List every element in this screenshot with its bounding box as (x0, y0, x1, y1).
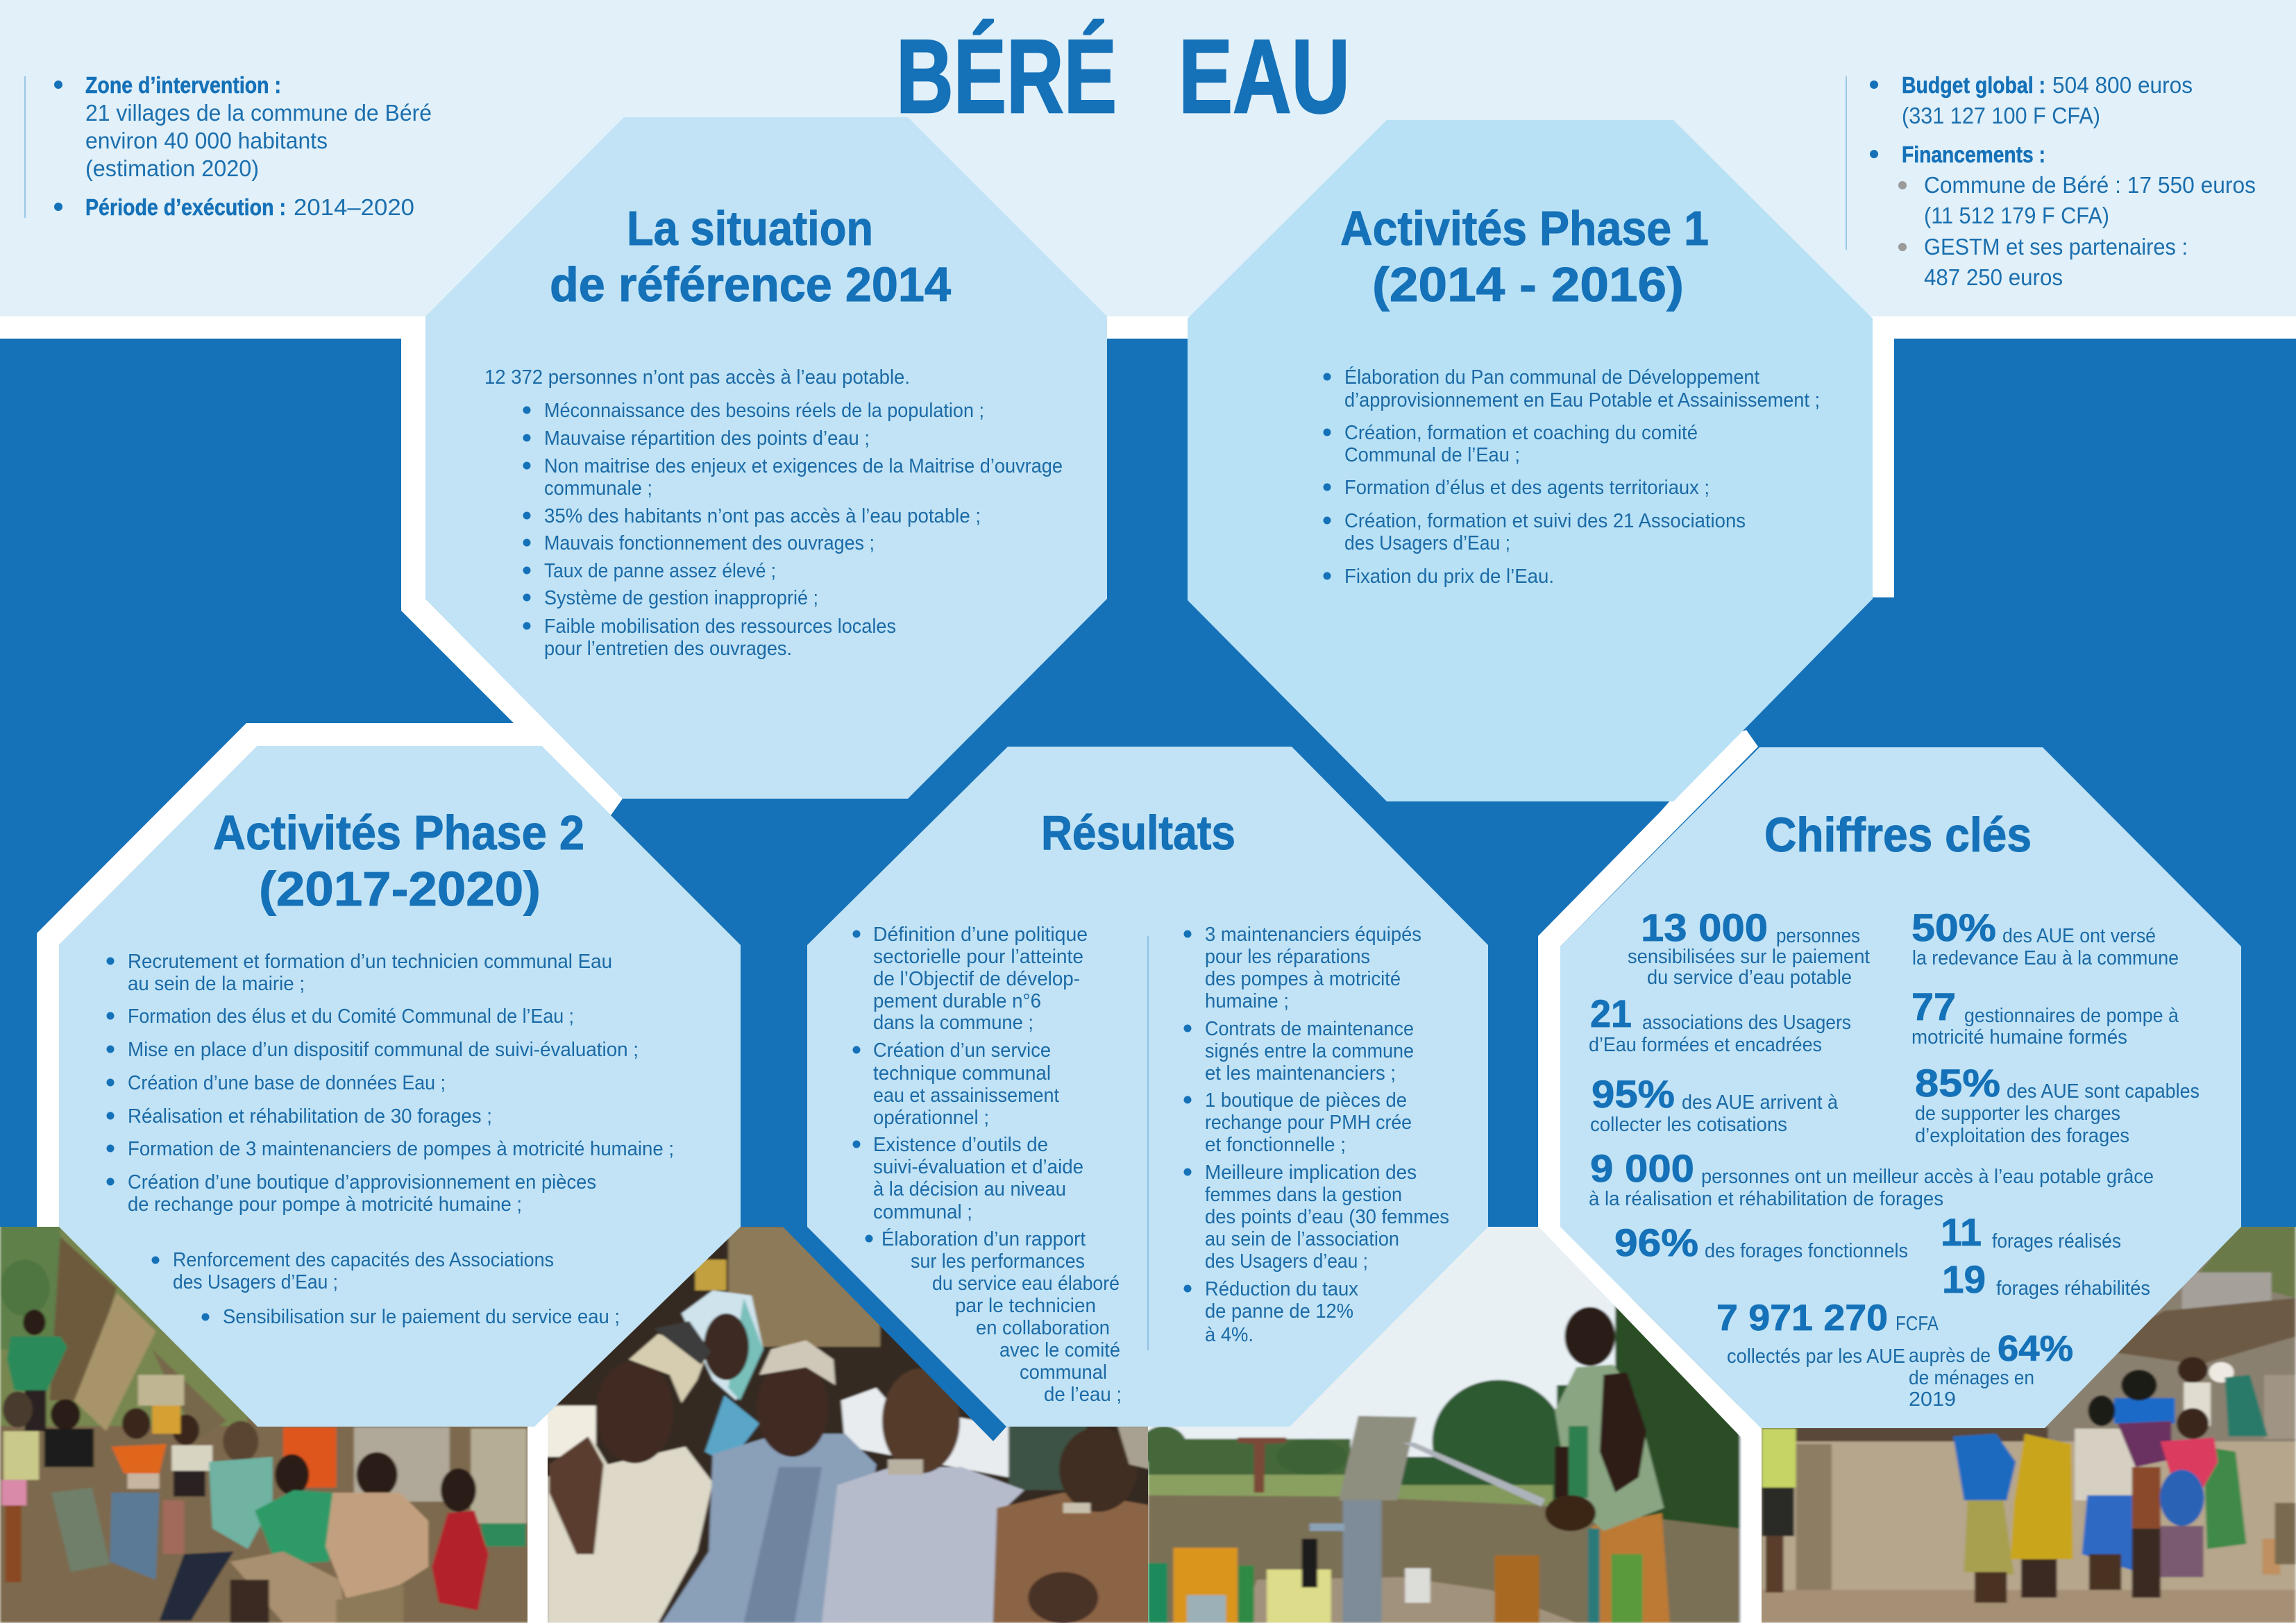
stat: 95%: 95% (1592, 1072, 1675, 1116)
stat: 21 associations: d’Eau formées et encadrées (1589, 1034, 1822, 1056)
text block: zone and period: 21 villages de la commune de Béré (85, 100, 432, 126)
stat: 21 associations: 21 (1590, 992, 1632, 1035)
stat: 21 associations (1589, 992, 1851, 1056)
text block: résultats right column: femmes dans la gestion (1205, 1184, 1402, 1206)
text block: résultats left column: opérationnel ; (873, 1107, 989, 1129)
text block: résultats right column: des Usagers d’eau ; (1205, 1250, 1368, 1273)
stat: 64%: de ménages en (1909, 1367, 2034, 1389)
text block: phase 2 list: Création d’une boutique d’approvisionnement en pièces (128, 1171, 596, 1193)
text block: résultats left column: du service eau élaboré (932, 1273, 1120, 1295)
stat: 95%: des AUE arrivent à (1682, 1091, 1839, 1114)
text block: situation list: communale ; (544, 477, 652, 500)
stat: 64%: auprès de (1909, 1345, 1991, 1367)
text block: phase 2 list: de rechange pour pompe à motricité humaine ; (128, 1193, 522, 1216)
stat: 13 000 personnes: 13 000 (1641, 906, 1768, 949)
text block: résultats left column: suivi-évaluation et d’aide (873, 1156, 1083, 1178)
stat: 85%: 85% (1915, 1061, 2000, 1105)
text block: zone and period (24, 72, 432, 220)
panel: résultats (807, 747, 1488, 1427)
stat: 11 forages (1941, 1210, 2121, 1254)
text block: résultats left column: de l’Objectif de dévelop- (873, 968, 1080, 990)
text block: résultats left column: Définition d’une politique (873, 924, 1088, 946)
stat: 85% (1915, 1061, 2200, 1147)
text block: phase 2 list: Mise en place d’un dispositif communal de suivi-évaluation ; (128, 1039, 639, 1061)
text block: situation list: Méconnaissance des besoins réels de la population ; (544, 400, 984, 422)
photo: elders in white and striped robes (541, 1221, 1152, 1623)
panel: chiffres clés (1560, 747, 2241, 1428)
stat: 77 gestionnaires (1911, 985, 2179, 1048)
text block: résultats right column: pour les réparations (1205, 946, 1370, 968)
text block: résultats left column: Création d’un service (873, 1039, 1051, 1062)
text block: budget and funding: 504 800 euros (2052, 72, 2193, 98)
photo: children at a walled water point (1735, 1221, 2296, 1623)
text block: résultats left column: en collaboration (976, 1317, 1110, 1339)
text block: situation list: Système de gestion inapproprié ; (544, 587, 818, 609)
text block: résultats left column: avec le comité (999, 1339, 1120, 1361)
text block: situation list: Faible mobilisation des ressources locales (544, 615, 896, 638)
text block: phase 2 list: Renforcement des capacités des Associations (173, 1249, 554, 1271)
text block: phase 2 list: Création d’une base de données Eau ; (128, 1072, 446, 1094)
stat: 50%: des AUE ont versé (2002, 925, 2156, 947)
stat: 77 gestionnaires: motricité humaine formés (1911, 1026, 2127, 1048)
text block: zone and period: (estimation 2020) (85, 155, 259, 181)
stat: 7 971 270 FCFA: collectés par les AUE (1727, 1345, 1905, 1368)
text block: phase 1 list: Création, formation et suivi des 21 Associations (1344, 510, 1746, 532)
text block: résultats left column: sur les performances (911, 1250, 1085, 1273)
stat: 13 000 personnes (1628, 906, 1870, 989)
stat: 77 gestionnaires: 77 (1911, 985, 1956, 1028)
heading: la situation: La situation (627, 201, 873, 255)
text block: situation list: pour l’entretien des ouvrages. (544, 638, 792, 660)
text block: résultats left column: par le technicien (955, 1295, 1096, 1317)
text block: résultats right column: rechange pour PMH crée (1205, 1112, 1412, 1134)
text block: phase 1 list: Élaboration du Pan communal de Développement (1344, 366, 1759, 389)
text block: résultats left column: eau et assainissement (873, 1085, 1059, 1107)
title (896, 17, 1350, 135)
text block: situation list: 12 372 personnes n’ont pas accès à l’eau potable. (484, 366, 910, 389)
stat: 50%: 50% (1911, 906, 1996, 949)
text block: résultats right column: Réduction du taux (1205, 1278, 1358, 1300)
text block: résultats right column: au sein de l’association (1205, 1228, 1399, 1250)
text block: phase 1 list (1323, 366, 1820, 588)
text block: résultats right column: de panne de 12% (1205, 1300, 1353, 1323)
text block: phase 2 list (107, 951, 674, 1328)
text block: situation list: Taux de panne assez élevé ; (544, 560, 776, 582)
title: EAU (1179, 17, 1350, 135)
panel: activités phase 2 (59, 746, 741, 1427)
text block: situation list: Mauvais fonctionnement des ouvrages ; (544, 532, 875, 554)
heading: phase 1 (1340, 201, 1709, 312)
text block: phase 1 list: Communal de l’Eau ; (1344, 444, 1520, 466)
text block: budget and funding: Commune de Béré : 17 550 euros (1924, 172, 2256, 198)
photo: girl using a hand pump (1140, 1221, 1759, 1623)
stat: 77 gestionnaires: gestionnaires de pompe à (1964, 1005, 2179, 1027)
stat: 19 forages: 19 (1942, 1257, 1986, 1301)
photo: villagers seated under a tree (0, 1221, 555, 1623)
text block: budget and funding: (331 127 100 F CFA) (1902, 103, 2100, 128)
stat: 85%: des AUE sont capables (2007, 1080, 2200, 1103)
text block: situation list: Mauvaise répartition des points d’eau ; (544, 427, 870, 450)
header band (0, 0, 2296, 316)
text block: budget and funding: Budget global : (1902, 72, 2045, 98)
text block: résultats right column (1184, 924, 1449, 1346)
text block: situation list: 35% des habitants n’ont pas accès à l’eau potable ; (544, 505, 981, 527)
text block: phase 1 list: Fixation du prix de l’Eau. (1344, 566, 1554, 588)
heading: la situation: de référence 2014 (550, 257, 951, 312)
heading: phase 1: Activités Phase 1 (1340, 201, 1709, 255)
text block: résultats right column: 3 maintenanciers équipés (1205, 924, 1421, 946)
text block: phase 2 list: des Usagers d’Eau ; (173, 1271, 338, 1293)
text block: résultats right column: et fonctionnelle ; (1205, 1134, 1346, 1156)
heading: la situation (550, 201, 951, 312)
text block: zone and period: Période d’exécution : (85, 194, 286, 220)
stat: 9 000 personnes: à la réalisation et réhabilitation de forages (1589, 1188, 1943, 1210)
panel: activités phase 1 (1188, 120, 1873, 801)
stat: 19 forages (1942, 1257, 2150, 1301)
text block: situation list (484, 366, 1063, 660)
heading: phase 2 (213, 806, 584, 916)
stat: 64% (1909, 1329, 2073, 1411)
text block: phase 2 list: Formation des élus et du Comité Communal de l’Eau ; (128, 1005, 574, 1028)
text block: phase 2 list: au sein de la mairie ; (128, 973, 305, 995)
text block: résultats left column (852, 924, 1122, 1406)
text block: phase 1 list: Création, formation et coaching du comité (1344, 422, 1698, 444)
text block: résultats right column: signés entre la commune (1205, 1040, 1414, 1062)
text block: phase 1 list: des Usagers d’Eau ; (1344, 532, 1510, 554)
stat: 13 000 personnes: du service d’eau potable (1647, 967, 1852, 989)
stat: 7 971 270 FCFA: FCFA (1896, 1313, 1939, 1335)
stat: 9 000 personnes: personnes ont un meilleur accès à l’eau potable grâce (1701, 1166, 2154, 1188)
text block: résultats left column: technique communal (873, 1062, 1051, 1085)
text block: résultats left column: Élaboration d’un rapport (881, 1227, 1086, 1250)
stat: 13 000 personnes: personnes (1776, 925, 1860, 947)
stat: 85%: d’exploitation des forages (1915, 1125, 2129, 1147)
stat: 19 forages: forages réhabilités (1996, 1277, 2150, 1300)
text block: résultats left column: de l’eau ; (1044, 1384, 1122, 1406)
text block: résultats right column: 1 boutique de pièces de (1205, 1089, 1407, 1112)
title: BÉRÉ (896, 17, 1117, 135)
stat: 11 forages: 11 (1941, 1210, 1982, 1254)
text block: phase 2 list: Formation de 3 maintenanciers de pompes à motricité humaine ; (128, 1138, 674, 1160)
text block: résultats left column: Existence d’outils de (873, 1134, 1048, 1156)
text block: budget and funding: GESTM et ses partenaires : (1924, 234, 2188, 260)
stat: 96%: des forages fonctionnels (1705, 1240, 1908, 1262)
text block: zone and period: Zone d’intervention : (85, 72, 281, 98)
stat: 7 971 270 FCFA (1716, 1298, 1939, 1368)
stat: 11 forages: forages réalisés (1992, 1230, 2121, 1252)
text block: situation list: Non maitrise des enjeux et exigences de la Maitrise d’ouvrage (544, 455, 1063, 477)
text block: résultats right column: Meilleure implication des (1205, 1162, 1417, 1184)
text block: résultats left column: dans la commune ; (873, 1012, 1033, 1034)
stat: 9 000 personnes (1589, 1146, 2154, 1210)
stat: 64%: 2019 (1909, 1388, 1956, 1411)
text block: résultats left column: sectorielle pour l’atteinte (873, 946, 1083, 968)
text block: résultats right column: humaine ; (1205, 990, 1289, 1012)
heading: phase 1: (2014 - 2016) (1372, 257, 1684, 312)
stat: 64%: 64% (1998, 1329, 2073, 1369)
heading: résultats: Résultats (1041, 806, 1235, 860)
text block: budget and funding: 487 250 euros (1924, 264, 2063, 290)
stat: 21 associations: associations des Usagers (1642, 1012, 1851, 1034)
text block: résultats left column: pement durable n°6 (873, 990, 1041, 1012)
text block: résultats left column: communal (1020, 1361, 1107, 1384)
text block: budget and funding: (11 512 179 F CFA) (1924, 203, 2109, 228)
text block: résultats right column: et les maintenanciers ; (1205, 1062, 1396, 1085)
text block: phase 2 list: Réalisation et réhabilitation de 30 forages ; (128, 1105, 492, 1128)
panel: situation de référence (425, 117, 1107, 799)
blue background field (0, 339, 2296, 1227)
stat: 13 000 personnes: sensibilisées sur le paiement (1628, 946, 1870, 968)
stat: 50%: la redevance Eau à la commune (1912, 947, 2179, 969)
stat: 95% (1590, 1072, 1839, 1136)
text block: phase 1 list: d’approvisionnement en Eau Potable et Assainissement ; (1344, 389, 1820, 411)
text block: résultats left column: communal ; (873, 1201, 972, 1223)
stat: 96% (1614, 1221, 1908, 1264)
text block: phase 1 list: Formation d’élus et des agents territoriaux ; (1344, 477, 1710, 499)
text block: résultats right column: des pompes à motricité (1205, 968, 1401, 990)
stat: 50% (1911, 906, 2179, 969)
stat: 7 971 270 FCFA: 7 971 270 (1716, 1298, 1888, 1339)
text block: zone and period: 2014–2020 (294, 194, 414, 220)
stat: 95%: collecter les cotisations (1590, 1114, 1787, 1136)
heading: phase 2: Activités Phase 2 (213, 806, 584, 860)
stat: 85%: de supporter les charges (1915, 1103, 2120, 1125)
text block: budget and funding: Financements : (1902, 142, 2045, 167)
stat: 9 000 personnes: 9 000 (1590, 1146, 1694, 1190)
stat: 96%: 96% (1614, 1221, 1698, 1264)
text block: phase 2 list: Recrutement et formation d’un technicien communal Eau (128, 951, 612, 973)
heading: phase 2: (2017-2020) (259, 862, 541, 916)
text block: résultats right column: Contrats de maintenance (1205, 1018, 1414, 1040)
text block: phase 2 list: Sensibilisation sur le paiement du service eau ; (223, 1306, 620, 1328)
heading: chiffres clés: Chiffres clés (1764, 808, 2032, 862)
text block: résultats right column: des points d’eau (30 femmes (1205, 1206, 1449, 1228)
text block: zone and period: environ 40 000 habitants (85, 128, 328, 153)
text block: résultats left column: à la décision au niveau (873, 1178, 1066, 1200)
text block: résultats right column: à 4%. (1205, 1324, 1253, 1346)
text block: budget and funding (1846, 72, 2256, 290)
